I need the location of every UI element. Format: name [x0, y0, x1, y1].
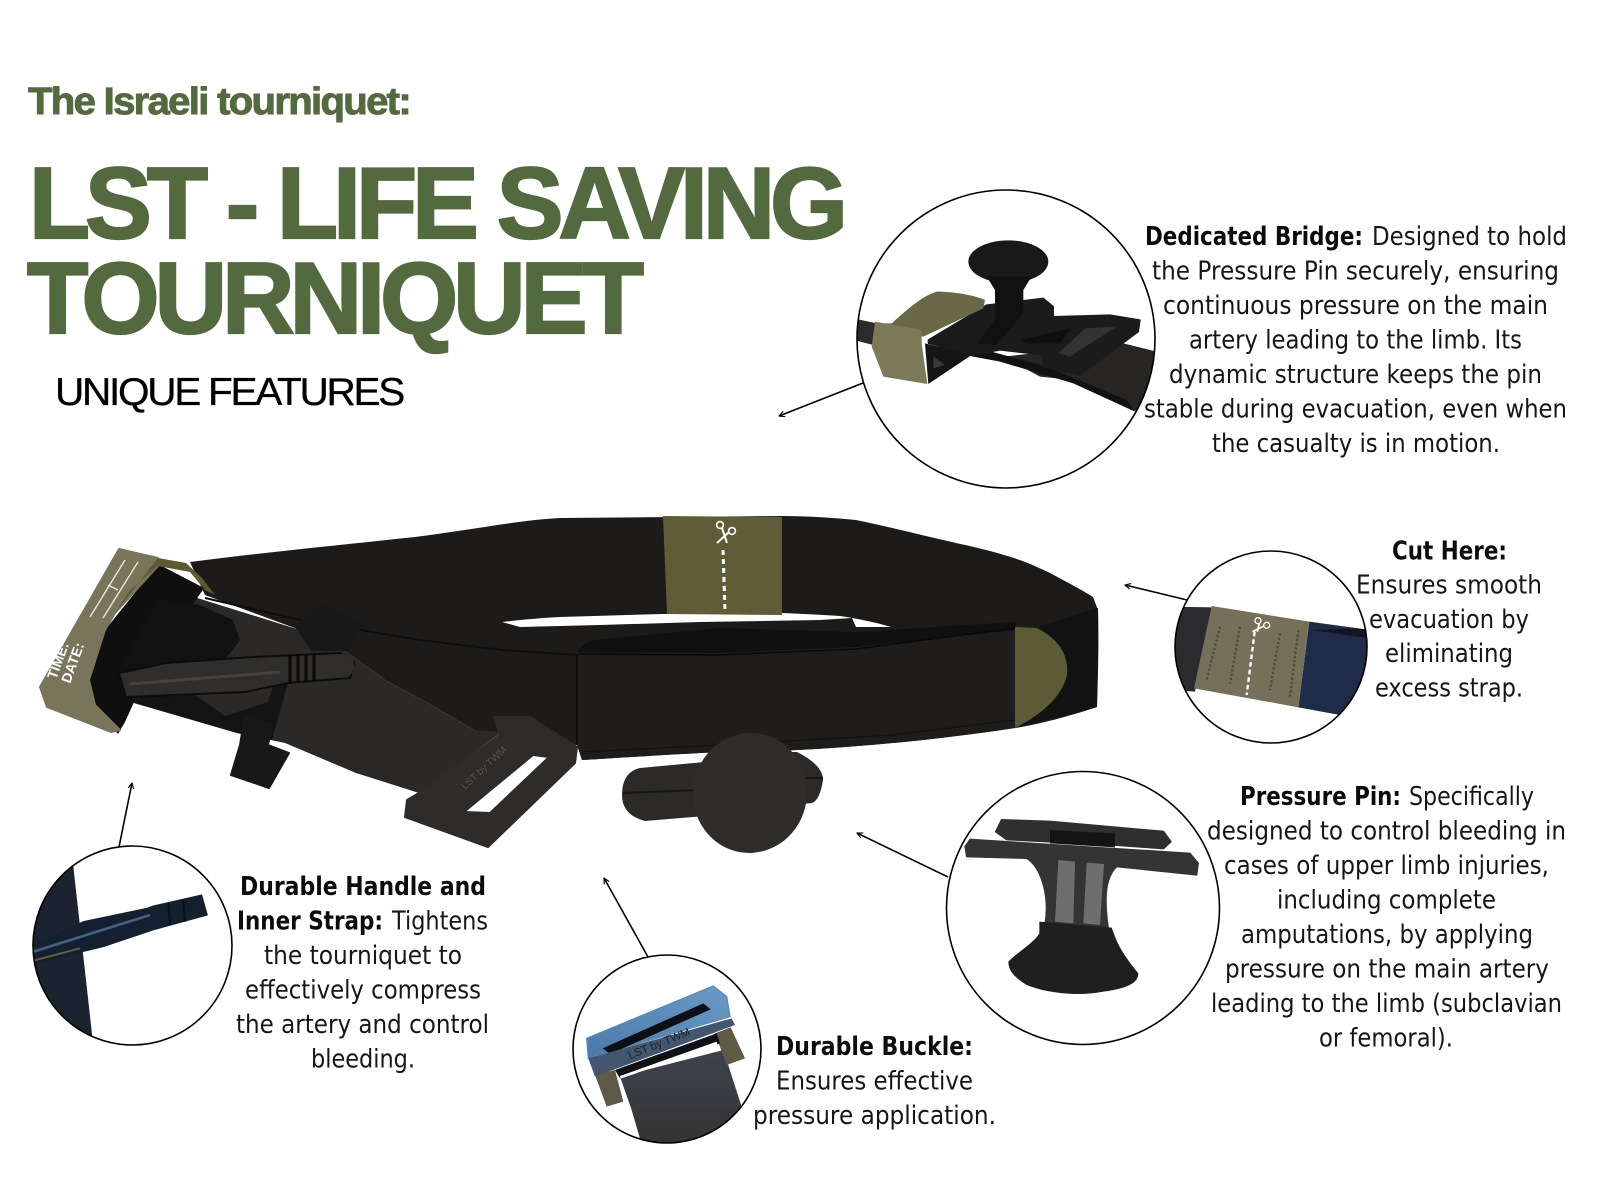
text: pressure pin: cases of upper limb injuries, [1224, 851, 1549, 881]
title: LST - Life Saving Tourniquet [27, 148, 843, 355]
scissors icon [717, 522, 735, 543]
strap inner lining [115, 558, 215, 613]
velcro on inner strap [122, 600, 240, 668]
text: durable buckle [753, 1032, 996, 1131]
text: pressure pin: Pressure Pin: [1240, 782, 1401, 812]
loose loop [190, 680, 275, 716]
arrow: pressure pin [857, 833, 948, 877]
pin knob [685, 726, 815, 860]
black frame plate [86, 564, 204, 734]
text: pressure pin [1207, 782, 1566, 1054]
text: dedicated bridge: continuous pressure on the main [1163, 291, 1548, 321]
text: cut here: Cut Here: [1392, 536, 1507, 566]
text: cut here: Ensures smooth [1356, 570, 1542, 600]
text: durable handle and inner strap [236, 872, 489, 1075]
olive cut here patch [663, 516, 782, 615]
text: dedicated bridge: the Pressure Pin securely, ensuring [1152, 257, 1559, 287]
circle photo: cut here [1172, 551, 1370, 743]
front padded strap [205, 598, 1098, 760]
text: durable buckle: Durable Buckle: [776, 1032, 973, 1062]
text: pressure pin: amputations, by applying [1241, 920, 1533, 950]
text: pressure pin: designed to control bleeding in [1207, 817, 1566, 847]
arrow: buckle [604, 878, 648, 957]
olive end patch [1015, 627, 1067, 728]
time date label [44, 640, 87, 685]
text: durable handle and inner strap: effectively compress [245, 976, 481, 1006]
text: dedicated bridge [1144, 222, 1567, 459]
text: pressure pin: including complete [1277, 886, 1496, 916]
lower black region below handle [126, 683, 288, 740]
circle photo: buckle: LST by TWM [627, 1026, 692, 1062]
grey inner strap [119, 597, 502, 793]
text: durable buckle: pressure application. [753, 1101, 996, 1131]
text: cut here: eliminating [1385, 639, 1513, 669]
windlass handle [119, 653, 354, 697]
buckle: LST by TWM [460, 745, 509, 792]
title: LST - Life Saving Tourniquet: LST - LIFE SAVING [29, 148, 843, 260]
text: cut here: evacuation by [1369, 605, 1529, 635]
arrow: bridge [779, 383, 863, 416]
time date label: DATE: [58, 640, 87, 685]
text: cut here [1356, 536, 1542, 704]
text: dedicated bridge: dynamic structure keeps the pin [1169, 360, 1542, 390]
text: pressure pin: pressure on the main artery [1225, 955, 1549, 985]
buckle [405, 717, 577, 847]
text: durable handle and inner strap: the artery and control [236, 1010, 489, 1040]
title: LST - Life Saving Tourniquet: TOURNIQUET [27, 243, 643, 355]
subtitle: unique features: UNIQUE FEATURES [55, 371, 404, 414]
text: durable handle and inner strap: Durable Handle and [240, 872, 486, 902]
cut here dashed line [723, 550, 725, 611]
time date label: TIME: [44, 640, 72, 681]
belt body [190, 516, 1098, 760]
text: pressure pin: Specifically [1409, 782, 1534, 812]
bottom plate of windlass [231, 715, 289, 788]
olive time/date strap [40, 549, 158, 732]
circle photo: dedicated bridge [853, 190, 1157, 488]
text: dedicated bridge: artery leading to the limb. Its [1189, 326, 1522, 356]
text: cut here: excess strap. [1375, 674, 1523, 704]
circle photo: buckle [573, 955, 761, 1150]
text: durable handle and inner strap: Inner Strap: [237, 907, 383, 937]
velcro end [1015, 608, 1098, 728]
arrow: handle [119, 783, 132, 847]
text: pressure pin: or femoral). [1319, 1024, 1453, 1054]
circle photo: handle and inner strap [20, 846, 232, 1045]
gap between straps [502, 613, 891, 627]
pin wings [622, 752, 823, 821]
arrow: cut here [1125, 585, 1187, 600]
top plate of windlass [296, 605, 362, 650]
text: durable handle and inner strap: bleeding. [311, 1045, 415, 1075]
text: dedicated bridge: Designed to hold [1372, 222, 1567, 252]
circle photo: pressure pin [946, 772, 1220, 1044]
text: durable handle and inner strap: the tourniquet to [264, 941, 462, 971]
text: dedicated bridge: Dedicated Bridge: [1145, 222, 1363, 252]
heading: The Israeli tourniquet: The Israeli tourniquet: [28, 81, 410, 123]
text: durable buckle: Ensures effective [776, 1066, 973, 1096]
main product image: tourniquet belt [40, 516, 1098, 847]
pressure pin product image [622, 726, 823, 860]
text: durable handle and inner strap: Tightens [391, 907, 488, 937]
text: dedicated bridge: the casualty is in motion. [1212, 429, 1500, 459]
